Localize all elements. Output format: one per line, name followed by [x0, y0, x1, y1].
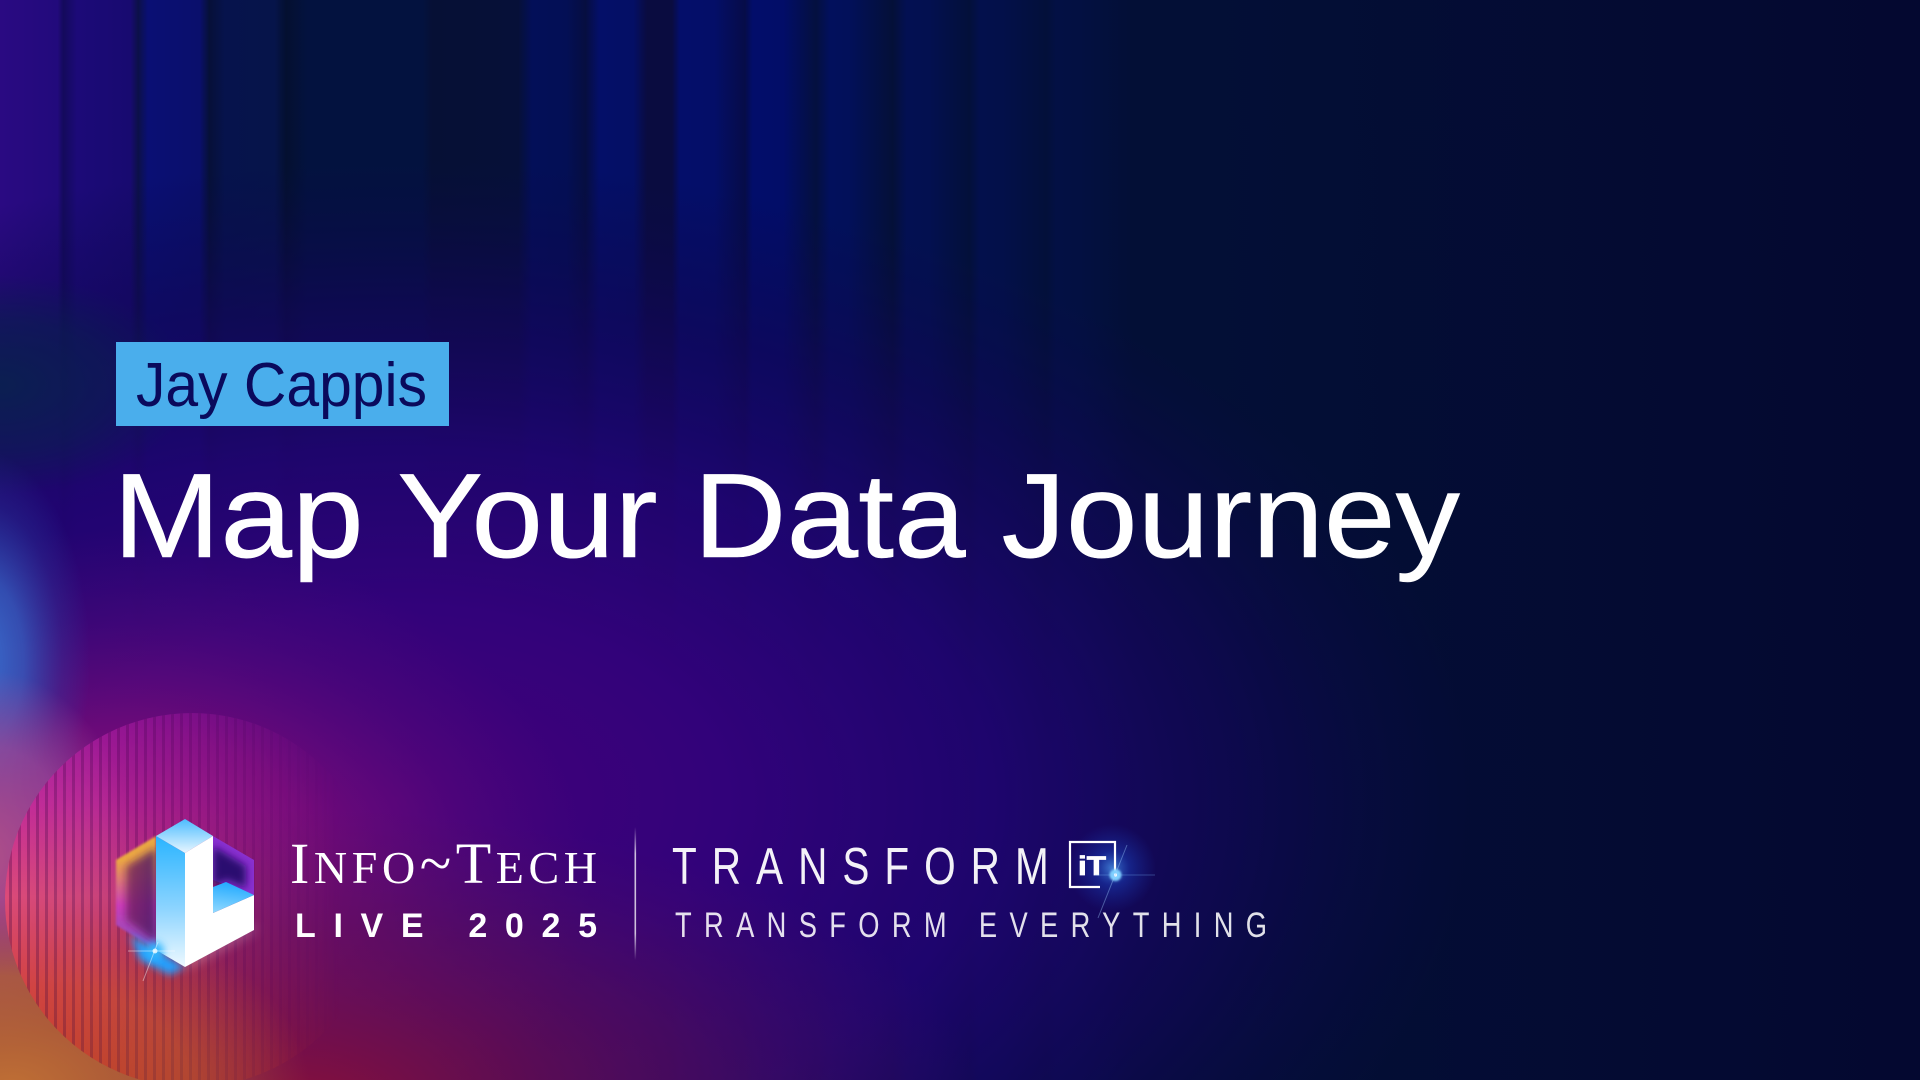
icon: Info-Tech Live hexagon L logo	[116, 819, 254, 981]
divider between logos	[634, 827, 636, 960]
title: Map Your Data Journey	[113, 449, 1460, 583]
logo wordmark: Live 2025: LIVE 2025	[295, 907, 597, 945]
decorative glowing circle with fine stripes	[5, 713, 297, 1080]
icon: Transform IT square logo with flare	[1068, 824, 1156, 918]
icon: Transform IT square logo with flare: iT	[1078, 851, 1107, 881]
logo wordmark: Info~Tech: INFO~TECH	[290, 831, 597, 896]
tagline: Transform Everything: TRANSFORM EVERYTHING	[675, 906, 1267, 945]
speaker name tag: Jay Cappis	[136, 351, 427, 420]
wordmark: Transform: TRANSFORM	[672, 837, 1049, 895]
